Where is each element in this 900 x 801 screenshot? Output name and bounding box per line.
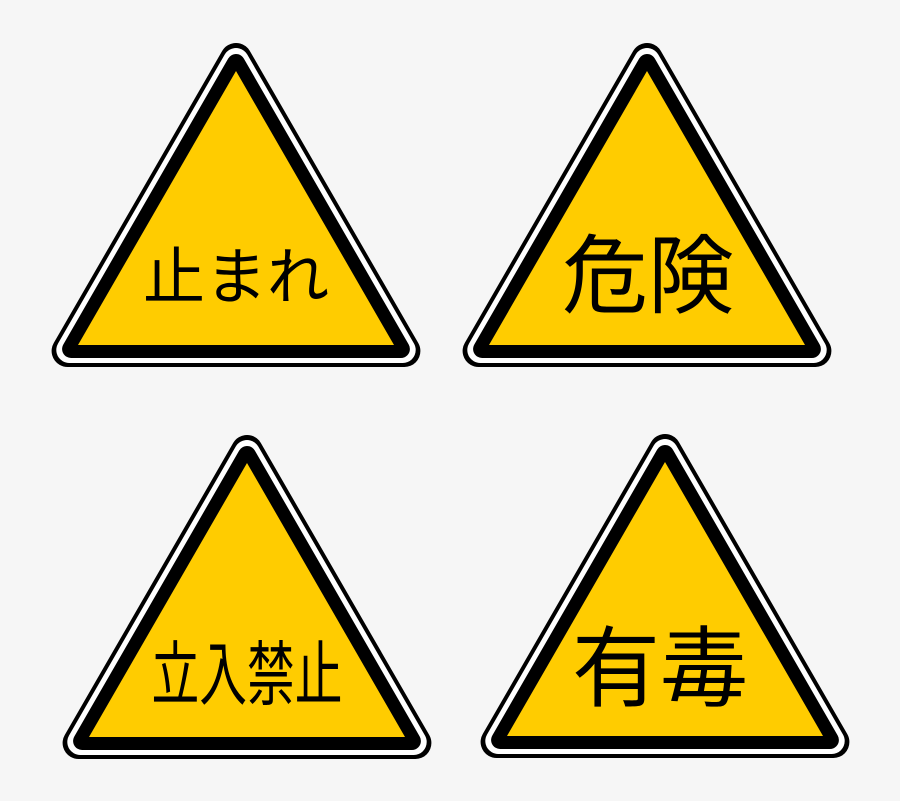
text: 止まれ: 止まれ	[143, 244, 329, 312]
sign: 有毒	[497, 450, 833, 742]
sign: 止まれ	[68, 59, 404, 351]
sign: 立入禁止	[79, 451, 415, 743]
sign: 危険	[479, 59, 815, 351]
text: 立入禁止: 立入禁止	[152, 636, 342, 714]
text: 危険: 危険	[562, 229, 734, 325]
text: 有毒: 有毒	[572, 620, 748, 718]
